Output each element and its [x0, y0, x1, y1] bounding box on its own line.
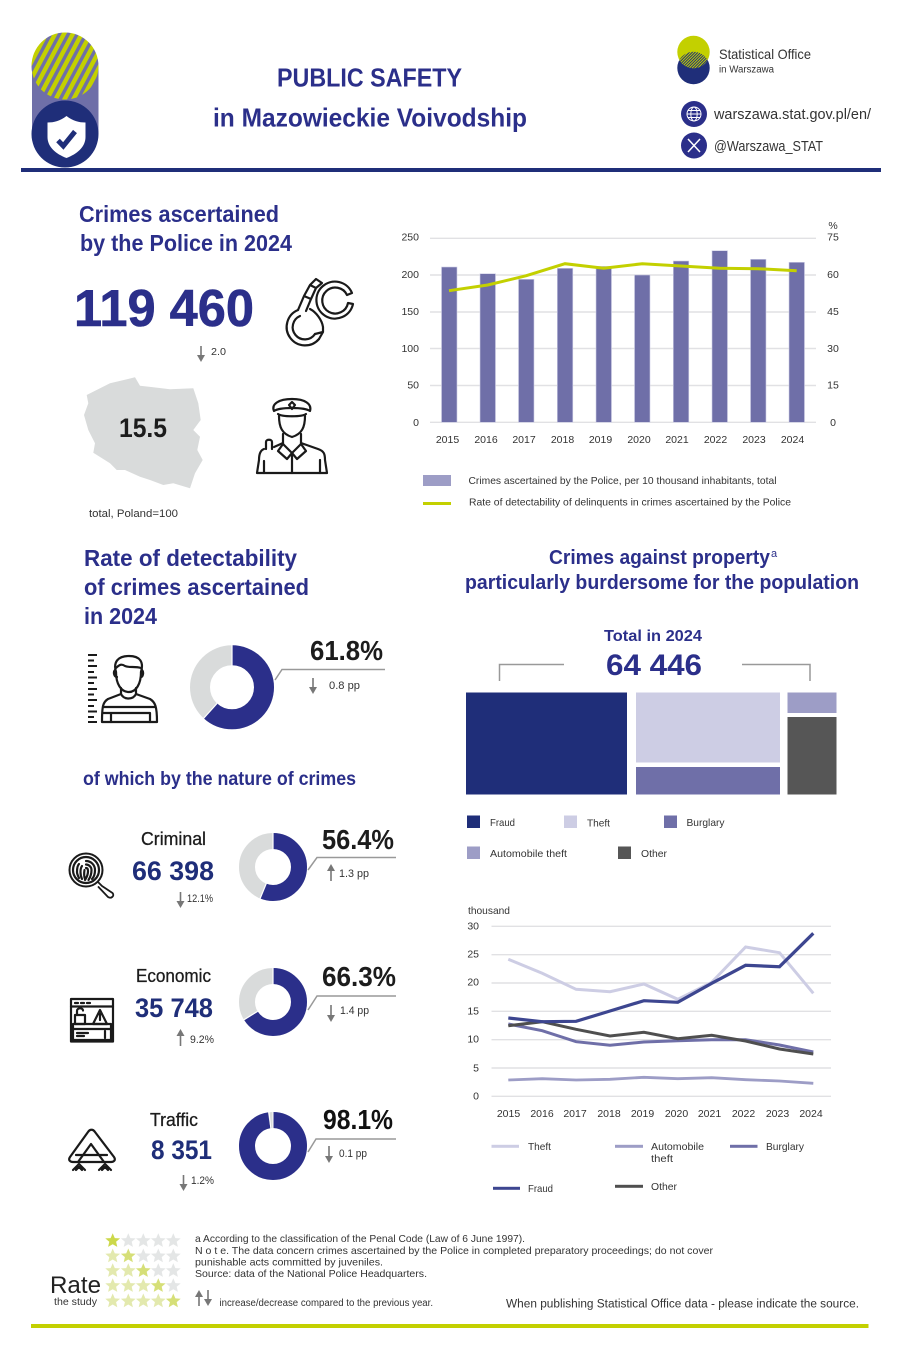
right axis labels: 30: [827, 343, 839, 355]
year labels: 2023: [766, 1108, 789, 1120]
panel: criminal crimes: Criminal: [141, 829, 206, 849]
panel: traffic crimes: [69, 1104, 396, 1191]
callout: 61.8%: 0.8 pp: [329, 680, 360, 692]
footnotes: N o t e. The data concern crimes ascertained by the Police in completed preparatory proceedings; do not cover: [195, 1245, 714, 1257]
panel: criminal crimes: 1.3 pp: [339, 868, 369, 880]
year labels: 2020: [665, 1108, 688, 1120]
panel: economic crimes: 1.4 pp: [340, 1005, 369, 1017]
other block: [788, 717, 836, 794]
right axis labels: 75: [827, 232, 839, 244]
line chart legend: Automobile: [651, 1141, 704, 1153]
donut: overall 61.8%: [200, 643, 264, 719]
left axis labels: 100: [401, 343, 419, 355]
donut: 98.1%: [247, 1111, 299, 1172]
year labels: 2016: [530, 1108, 554, 1120]
map: Poland with 15.5: [84, 377, 203, 488]
year labels: 2021: [698, 1108, 721, 1120]
heading: crimes ascertained: by the Police in 2024: [80, 230, 292, 256]
treemap legend: [467, 816, 725, 860]
right axis labels: 0: [830, 417, 836, 429]
line: theft: [508, 947, 813, 999]
line: fraud: [508, 933, 813, 1022]
year labels: 2016: [474, 434, 498, 446]
right axis labels: 45: [827, 306, 839, 318]
rate the study: star rating: Rate: [50, 1272, 101, 1299]
website link: [681, 101, 872, 127]
icon: economic crime window: [71, 999, 113, 1042]
treemap: crimes by type: [466, 692, 836, 794]
title: [213, 62, 527, 132]
year labels: 2019: [631, 1108, 654, 1120]
treemap legend: Fraud: [490, 817, 515, 829]
year labels: 2015: [436, 434, 459, 446]
X handle: @Warszawa_STAT: [714, 139, 823, 155]
footnotes: [195, 1233, 714, 1280]
icon: traffic warning triangle: [69, 1130, 115, 1170]
y axis labels: 10: [467, 1034, 479, 1046]
y axis labels: [467, 920, 479, 1102]
theft block: [636, 692, 780, 762]
key number: 119 460: 119 460: [74, 280, 254, 338]
left axis labels: [401, 232, 419, 429]
treemap legend: Burglary: [686, 817, 725, 829]
line: burglary: [508, 1024, 813, 1052]
panel: economic crimes: 9.2%: [190, 1034, 214, 1046]
donut: 56.4%: [247, 832, 299, 900]
line chart: crimes by type, thousand: [467, 905, 831, 1120]
line: other: [508, 1022, 813, 1054]
year labels: 2024: [799, 1108, 823, 1120]
heading: rate of detectability: [84, 545, 309, 629]
heading: crimes against property: [465, 546, 859, 594]
heading: crimes against property: a: [771, 548, 778, 560]
year labels: [436, 434, 804, 446]
heading: rate of detectability: of crimes ascertained: [84, 574, 309, 600]
panel: traffic crimes: 98.1%: [323, 1104, 393, 1135]
right axis labels: 60: [827, 269, 839, 281]
rate the study: star rating: [50, 1233, 181, 1308]
title: PUBLIC SAFETY: [277, 62, 462, 92]
panel: traffic crimes: 0.1 pp: [339, 1148, 367, 1160]
heading: rate of detectability: in 2024: [84, 603, 157, 629]
panel: traffic crimes: 1.2%: [191, 1175, 214, 1187]
y axis labels: 25: [467, 948, 479, 960]
year labels: 2022: [732, 1108, 755, 1120]
year labels: [497, 1108, 823, 1120]
y axis labels: 0: [473, 1090, 479, 1102]
total in 2024: Total in 2024: [604, 628, 702, 645]
X handle: [681, 132, 823, 158]
line chart legend: [492, 1141, 805, 1195]
left axis labels: 50: [407, 380, 419, 392]
footnotes: punishable acts committed by juveniles.: [195, 1256, 383, 1268]
panel: economic crimes: 35 748: [135, 993, 213, 1023]
treemap legend: Automobile theft: [490, 848, 567, 860]
title: in Mazowieckie Voivodship: [213, 102, 527, 132]
year labels: 2018: [551, 434, 574, 446]
line chart legend: Burglary: [766, 1141, 805, 1153]
arrow key: [195, 1290, 433, 1309]
total in 2024: 64 446: [606, 649, 702, 682]
chart legend: [423, 475, 791, 508]
year labels: 2017: [512, 434, 536, 446]
trend: down 2.0: 2.0: [211, 346, 226, 358]
automobile theft block: [788, 692, 836, 713]
chart legend: Crimes ascertained by the Police, per 10 thousand inhabitants, total: [468, 475, 776, 487]
heading: rate of detectability: Rate of detectability: [84, 545, 297, 571]
logo: Statistical Office in Warszawa: [677, 36, 811, 84]
panel: criminal crimes: 12.1%: [187, 893, 213, 905]
total in 2024: [500, 628, 810, 682]
year labels: 2015: [497, 1108, 520, 1120]
panel: criminal crimes: [70, 824, 396, 908]
rate the study: star rating: the study: [54, 1296, 98, 1308]
line chart legend: Other: [651, 1181, 677, 1193]
line chart legend: theft: [651, 1153, 673, 1165]
source notice: When publishing Statistical Office data - please indicate the source.: [506, 1298, 859, 1310]
right axis labels: 15: [827, 380, 839, 392]
treemap legend: Other: [641, 848, 667, 860]
donut: 66.3%: [241, 967, 299, 1028]
y axis labels: 15: [467, 1006, 479, 1018]
website link: warszawa.stat.gov.pl/en/: [713, 107, 872, 123]
year labels: 2017: [563, 1108, 587, 1120]
panel: traffic crimes: 8 351: [151, 1135, 212, 1165]
year labels: 2020: [627, 434, 651, 446]
panel: economic crimes: 66.3%: [322, 961, 396, 992]
right axis labels: [827, 220, 839, 429]
panel: traffic crimes: Traffic: [150, 1110, 198, 1130]
year labels: 2023: [742, 434, 766, 446]
subheading: nature of crimes: of which by the nature of crimes: [83, 768, 356, 790]
line chart legend: Fraud: [528, 1183, 553, 1195]
line: automobile theft: [508, 1077, 813, 1083]
icon: prisoner with height ruler: [88, 655, 157, 722]
logo: Statistical Office in Warszawa: Statistical Office: [719, 46, 811, 62]
year labels: 2018: [597, 1108, 621, 1120]
chart legend: Rate of detectability of delinquents in crimes ascertained by the Police: [469, 496, 791, 508]
arrow key: increase/decrease compared to the previous year.: [220, 1298, 433, 1309]
panel: criminal crimes: 66 398: [132, 856, 214, 886]
year labels: 2019: [589, 434, 612, 446]
year labels: 2024: [781, 434, 804, 446]
logo: Statistical Office in Warszawa: in Warszawa: [719, 64, 774, 76]
left axis labels: 200: [401, 269, 419, 281]
y axis labels: 20: [467, 976, 479, 988]
panel: economic crimes: [71, 961, 396, 1046]
right axis labels: %: [828, 220, 838, 232]
heading: crimes against property: particularly burdersome for the population: [465, 571, 859, 594]
line: rate of detectability: [449, 264, 797, 291]
map: Poland with 15.5: 15.5: [119, 413, 167, 443]
fraud block: [466, 692, 627, 794]
bar and line chart: crimes per 10 thousand and detectability: [401, 220, 839, 446]
heading: crimes ascertained: [79, 201, 292, 256]
treemap legend: Theft: [587, 818, 610, 830]
callout: 61.8%: [275, 635, 385, 694]
year labels: 2021: [665, 434, 689, 446]
line chart: crimes by type, thousand: thousand: [468, 905, 510, 917]
heading: crimes ascertained: Crimes ascertained: [79, 201, 279, 227]
left axis labels: 250: [401, 232, 419, 244]
y axis labels: 5: [473, 1062, 479, 1074]
year labels: 2022: [704, 434, 727, 446]
bars: crimes per 10 thousand inhabitants: [442, 251, 804, 422]
icon: handcuffs: [287, 279, 353, 345]
header icon: shield capsule: [32, 32, 98, 168]
icon: police officer: [257, 399, 327, 473]
y axis labels: 30: [467, 920, 479, 932]
panel: economic crimes: Economic: [136, 966, 211, 986]
footnotes: a According to the classification of the Penal Code (Law of 6 June 1997).: [195, 1233, 525, 1245]
heading: crimes against property: Crimes against property: [549, 546, 771, 569]
panel: criminal crimes: 56.4%: [322, 824, 394, 855]
callout: 61.8%: 61.8%: [310, 635, 383, 666]
icon: fingerprint magnifier: [70, 854, 113, 898]
line chart legend: Theft: [528, 1141, 551, 1153]
burglary block: [636, 767, 780, 794]
footnotes: Source: data of the National Police Headquarters.: [195, 1268, 427, 1280]
left axis labels: 150: [401, 306, 419, 318]
left axis labels: 0: [413, 417, 419, 429]
trend: down 2.0: [197, 346, 226, 362]
caption: total, Poland=100: total, Poland=100: [89, 508, 178, 520]
